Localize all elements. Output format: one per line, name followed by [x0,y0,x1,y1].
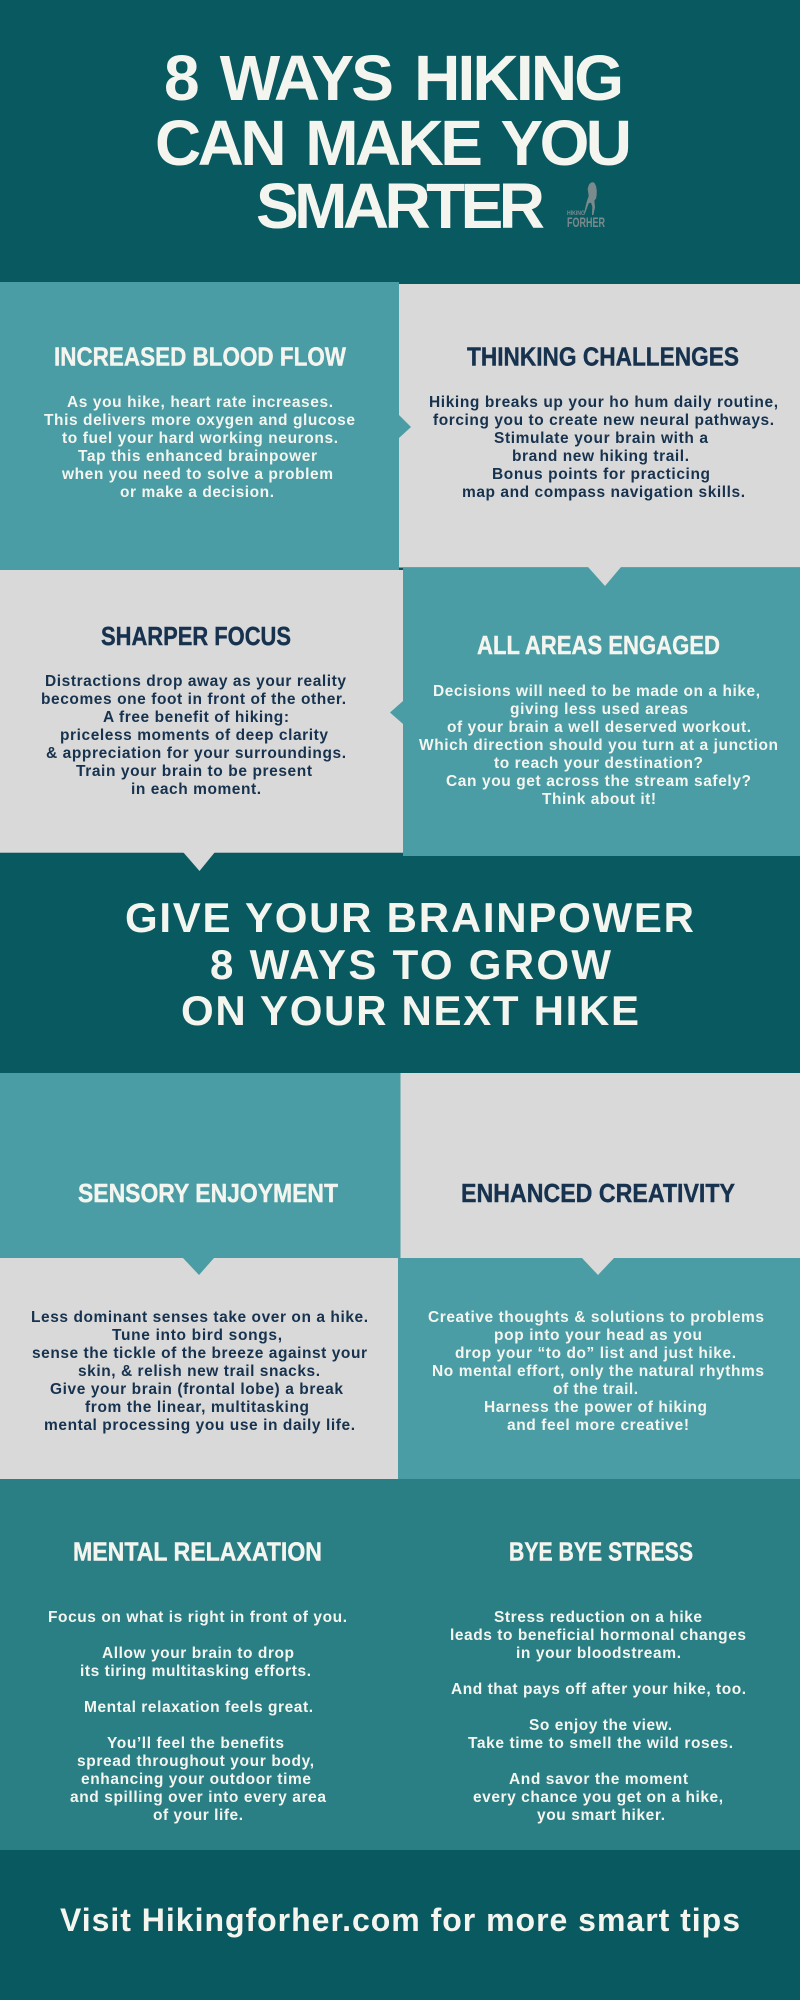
text block: sensory enjoyment body: mental processing you use in daily life. [44,1417,355,1434]
text block: all areas engaged body: Can you get across the stream safely? [446,773,751,790]
title: 8 WAYS HIKING [164,42,624,114]
text block: mental relaxation body: spread throughout your body, [77,1753,314,1770]
text block: bye bye stress body: in your bloodstream. [516,1645,681,1662]
text block: sharper focus body: Train your brain to be present [76,763,312,780]
panel: header banner [0,0,800,284]
text block: sharper focus body [41,673,346,798]
text block: mental relaxation body: Allow your brain to drop [102,1645,294,1662]
text block: bye bye stress body: So enjoy the view. [529,1717,672,1734]
text block: bye bye stress body: Take time to smell the wild roses. [468,1735,733,1752]
text block: enhanced creativity body: No mental effort, only the natural rhythms [432,1363,764,1380]
text block: thinking challenges body: Bonus points for practicing [492,466,710,483]
text block: enhanced creativity body: and feel more creative! [507,1417,689,1434]
heading: sensory enjoyment: SENSORY ENJOYMENT [78,1178,338,1208]
panel: sensory enjoyment body [0,1258,398,1479]
panel: sensory enjoyment heading [0,1073,400,1275]
text block: sharper focus body: Distractions drop away as your reality [45,673,346,690]
panel: increased blood flow [0,282,411,570]
heading: all areas engaged: ALL AREAS ENGAGED [477,630,720,660]
text block: sharper focus body: A free benefit of hiking: [103,709,289,726]
text block: thinking challenges body: Hiking breaks up your ho hum daily routine, [429,394,778,411]
text block: sensory enjoyment body: Give your brain (frontal lobe) a break [50,1381,343,1398]
text block: bye bye stress body [450,1609,746,1824]
band heading: ON YOUR NEXT HIKE [181,987,639,1034]
title: CAN MAKE YOU [155,107,632,179]
text block: increased blood flow body: Tap this enhanced brainpower [78,448,317,465]
text block: mental relaxation body: You’ll feel the benefits [107,1735,284,1752]
text block: bye bye stress body: And that pays off after your hike, too. [451,1681,746,1698]
panel: enhanced creativity body [398,1258,800,1479]
text block: all areas engaged body: to reach your destination? [494,755,703,772]
text block: sensory enjoyment body: sense the tickle of the breeze against your [32,1345,367,1362]
arrow: sensory enjoyment down [183,1258,214,1275]
text block: sensory enjoyment body: skin, & relish new trail snacks. [78,1363,320,1380]
text block: all areas engaged body: Decisions will need to be made on a hike, [433,683,760,700]
text block: sharper focus body: priceless moments of deep clarity [60,727,328,744]
heading: enhanced creativity: ENHANCED CREATIVITY [461,1178,735,1208]
text block: mental relaxation body [48,1609,347,1824]
text block: increased blood flow body: when you need to solve a problem [61,466,333,483]
text block: sharper focus body: & appreciation for your surroundings. [46,745,346,762]
heading: bye bye stress: BYE BYE STRESS [509,1536,693,1566]
panel: thinking challenges [399,284,800,586]
text block: sensory enjoyment body: Tune into bird songs, [112,1327,282,1344]
arrow: sharper focus down [183,852,215,871]
text block: enhanced creativity body: pop into your head as you [494,1327,702,1344]
text block: all areas engaged body: of your brain a well deserved workout. [447,719,751,736]
arrow: thinking challenges down [588,567,621,586]
text block: increased blood flow body: This delivers more oxygen and glucose [44,412,355,429]
band heading: 8 WAYS TO GROW [210,941,611,988]
text block: enhanced creativity body: Creative thoughts & solutions to problems [428,1309,764,1326]
band heading: GIVE YOUR BRAINPOWER [125,894,694,941]
text block: thinking challenges body: brand new hiking trail. [512,448,689,465]
text block: all areas engaged body: giving less used areas [510,701,688,718]
text block: mental relaxation body: Focus on what is right in front of you. [48,1609,347,1626]
text block: all areas engaged body: Think about it! [542,791,656,808]
panel: enhanced creativity heading [400,1073,800,1275]
icon: hiking for her logo: FORHER [567,214,605,230]
text block: bye bye stress body: every chance you get on a hike, [473,1789,723,1806]
panel: give your brainpower band [0,853,800,1073]
arrow: all areas engaged left [390,701,403,724]
text block: sensory enjoyment body [31,1309,368,1434]
title [155,42,632,242]
text block: bye bye stress body: And savor the moment [509,1771,688,1788]
text block: thinking challenges body: map and compass navigation skills. [462,484,745,501]
text block: mental relaxation body: and spilling over into every area [70,1789,326,1806]
text block: enhanced creativity body: Harness the power of hiking [484,1399,707,1416]
text block: enhanced creativity body: of the trail. [553,1381,638,1398]
text block: thinking challenges body: forcing you to create new neural pathways. [433,412,774,429]
text block: increased blood flow body: or make a decision. [120,484,274,501]
text block: increased blood flow body: As you hike, heart rate increases. [67,394,333,411]
icon: hiking for her logo [567,182,605,230]
text block: bye bye stress body: you smart hiker. [537,1807,665,1824]
panel: sharper focus [0,570,403,871]
text block: enhanced creativity body: drop your “to do” list and just hike. [455,1345,736,1362]
text block: thinking challenges body [429,394,778,501]
text block: sharper focus body: becomes one foot in front of the other. [41,691,346,708]
text block: mental relaxation body: of your life. [153,1807,243,1824]
text block: sensory enjoyment body: from the linear, multitasking [85,1399,309,1416]
heading: increased blood flow: INCREASED BLOOD FLOW [54,342,346,372]
panel: relaxation and stress [0,1479,800,1850]
heading: mental relaxation: MENTAL RELAXATION [73,1536,322,1566]
text block: mental relaxation body: its tiring multitasking efforts. [80,1663,311,1680]
text block: sharper focus body: in each moment. [131,781,261,798]
text block: sensory enjoyment body: Less dominant senses take over on a hike. [31,1309,368,1326]
arrow: enhanced creativity down [582,1258,614,1275]
heading: sharper focus: SHARPER FOCUS [101,621,291,651]
heading: thinking challenges: THINKING CHALLENGES [467,342,739,372]
title: SMARTER [256,170,545,242]
footer call to action: Visit Hikingforher.com for more smart tips [60,1902,740,1938]
text block: thinking challenges body: Stimulate your brain with a [494,430,708,447]
panel: footer [0,1850,800,2000]
text block: increased blood flow body [44,394,355,501]
text block: enhanced creativity body [428,1309,764,1434]
text block: bye bye stress body: Stress reduction on a hike [494,1609,702,1626]
text block: all areas engaged body [419,683,778,808]
text block: bye bye stress body: leads to beneficial hormonal changes [450,1627,746,1644]
text block: mental relaxation body: enhancing your outdoor time [81,1771,311,1788]
text block: mental relaxation body: Mental relaxation feels great. [84,1699,313,1716]
arrow: increased blood flow right [399,415,411,438]
panel: all areas engaged [390,568,800,856]
text block: increased blood flow body: to fuel your hard working neurons. [62,430,338,447]
icon: hiking for her logo: HIKING [567,211,585,217]
text block: all areas engaged body: Which direction should you turn at a junction [419,737,778,754]
band heading [125,894,694,1034]
